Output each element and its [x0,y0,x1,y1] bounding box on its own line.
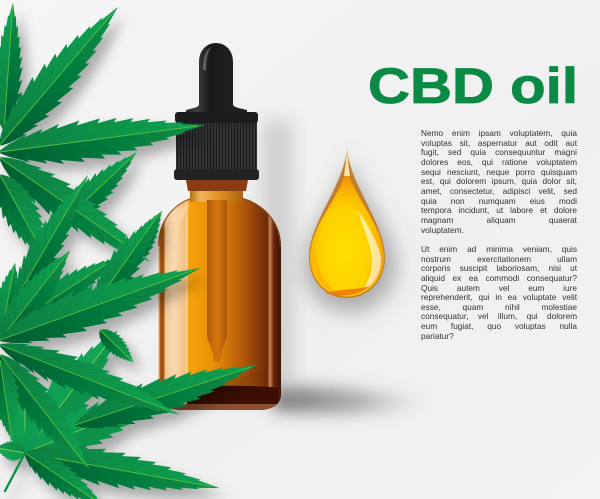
leaflet rising [82,203,173,314]
rubber bulb [186,43,247,114]
light leaflet right [17,375,173,473]
leaflet rising [2,167,102,308]
paragraph one: fugit, sed quia consequuntur magni [421,147,577,157]
oil drop [309,147,385,298]
paragraph two: corporis suscipit laboriosam, nisi ut [421,263,577,273]
leaflet down [0,166,64,271]
paragraph one: voluptatem. [421,225,464,235]
glass neck [190,191,243,202]
leaflet dark left [0,358,27,442]
leaflet down right [0,345,103,481]
collar [186,180,248,191]
paragraph two: aliquid ex ea commodi consequatur? [421,273,577,283]
leaflet horizontal [0,104,208,173]
dropper bottle [158,43,281,411]
leaflet long upper [0,248,207,360]
glass body [158,180,281,411]
light leaflet up [6,385,44,453]
paragraph two: Quis autem vel eum iure [421,282,577,292]
paragraph two: pariatur? [421,331,454,341]
leaflet right lower [69,347,264,443]
leaflet far right [22,435,223,499]
body text [421,128,577,341]
paragraph two [421,244,577,341]
paragraph two: nostrum exercitationem ullam [421,254,577,264]
plant: upper leaf group [0,0,208,308]
oil drop shadow [304,150,396,312]
leaflet lower diagonal [0,143,161,277]
plant: light leaf group [0,316,223,499]
cannabis leaves [0,0,264,499]
stem [5,453,25,491]
leaflet steep [0,260,29,343]
paragraph one [421,128,577,235]
paragraph two: reprehenderit, qui in ea voluptate velit [421,292,577,302]
paragraph two: consequatur, vel illum, qui dolorem [421,311,577,321]
leaflet back [12,244,125,333]
leaflet long lower [0,329,186,431]
paragraph one: voluptas sit, aspernatur aut odit aut [421,138,577,148]
leaflet up right [0,240,84,350]
light leaflet diagonal [6,316,136,467]
paragraph one: sequi nesciunt, neque porro quisquam [421,167,577,177]
leaflet upper diagonal [0,0,133,158]
bottle wall shadow [262,120,292,390]
leaflet back upper [50,141,147,236]
leaflet small back [114,204,173,277]
paragraph two: esse, quam nihil molestiae [421,302,577,312]
paragraph one: quia non numquam eius modi [421,196,577,206]
leaflet small left [0,437,27,464]
title: CBD oil [368,58,578,114]
paragraph one: est, qui dolorem ipsum, quia dolor sit, [421,176,577,186]
paragraph one: tempora incidunt, ut labore et dolore [421,205,577,215]
cap [174,112,259,180]
paragraph one: magnam aliquam quaerat [421,215,577,225]
paragraph one: dolores eos, qui ratione voluptatem [421,157,577,167]
dropper tube [207,200,227,362]
paragraph one: amet, consectetur, adipisci velit, sed [421,186,577,196]
leaflet bottom [17,441,112,499]
plant: main lower leaf group [0,203,264,481]
bottle floor shadow [272,387,430,413]
paragraph one: Nemo enim ipsam voluptatem, quia [421,128,577,138]
leaflet top [0,1,28,131]
small dark leaflet [93,323,141,370]
paragraph two: eum fugiat, quo voluptas nulla [421,321,577,331]
paragraph two: Ut enim ad minima veniam, quis [421,244,577,254]
